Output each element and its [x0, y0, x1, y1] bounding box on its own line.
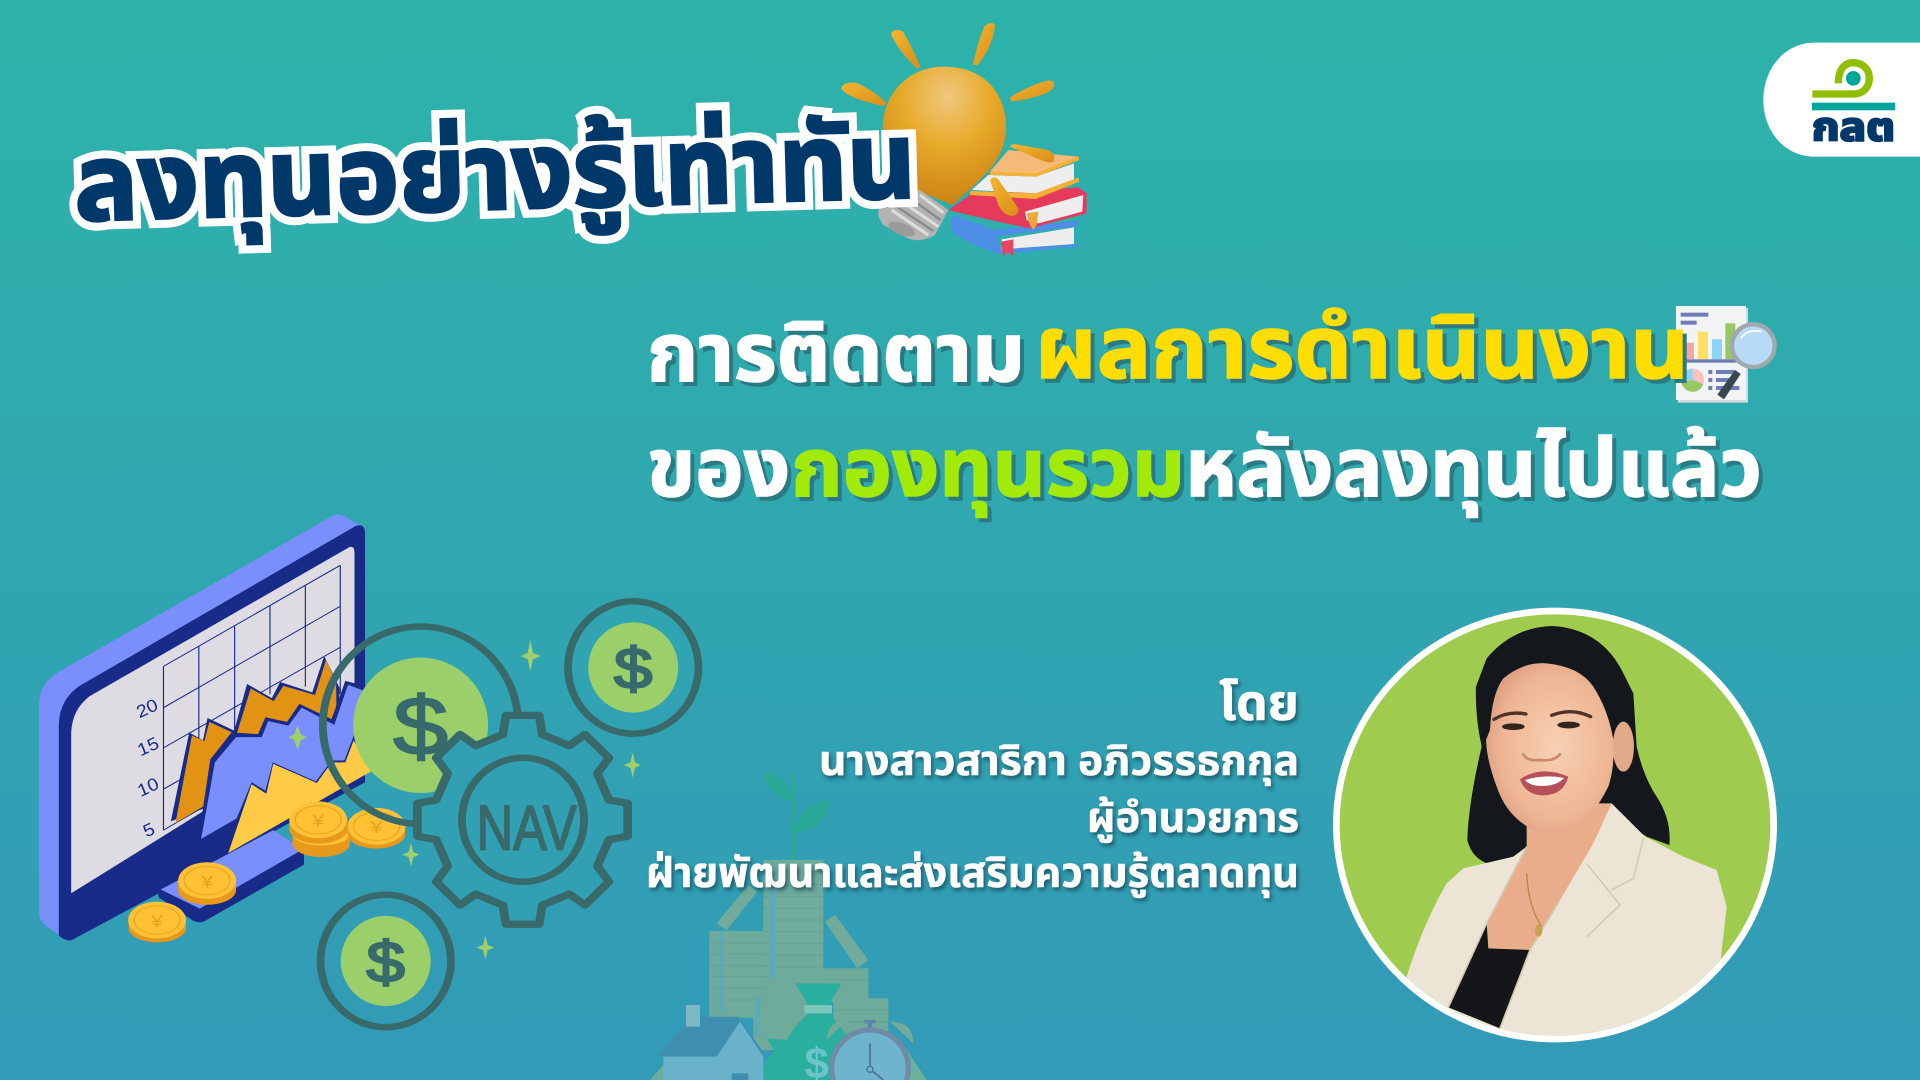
gold coins: ¥	[370, 817, 383, 837]
black top	[1448, 923, 1530, 1028]
computer monitor with line chart: 20	[130, 695, 163, 722]
lightbulb and books illustration	[840, 22, 1087, 258]
computer monitor with line chart: 15	[132, 733, 164, 759]
lightbulb screw base	[878, 190, 948, 240]
heading line 2: หลังลงทุนไปแล้ว	[1185, 409, 1762, 533]
sparkles	[402, 640, 641, 960]
computer monitor with line chart: 5	[138, 819, 159, 841]
department: ฝ่ายพัฒนาและส่งเสริมความรู้ตลาดทุน	[646, 842, 1299, 906]
name: นางสาวสาริกา อภิวรรธกกุล	[819, 730, 1299, 794]
hair	[1467, 626, 1670, 867]
icon: bottom dollar ring: $	[367, 931, 405, 994]
illustration: NAV chart, coins and gears	[39, 514, 702, 1030]
logo: กลต: กลต	[1812, 99, 1895, 159]
icon: large dollar ring	[323, 627, 518, 824]
computer monitor with line chart	[39, 514, 372, 940]
lightbulb with rays	[841, 23, 1054, 205]
icon: NAV gear	[417, 715, 628, 924]
blazer lapel shading	[1448, 838, 1643, 1028]
gold coins: ¥	[150, 912, 163, 931]
chest and neck	[1487, 803, 1612, 950]
ear	[1613, 722, 1634, 772]
eyes	[1502, 723, 1525, 730]
face	[1486, 663, 1614, 832]
heading line 1: ผลการดำเนินงาน	[1035, 287, 1689, 418]
portrait photo in circle	[1333, 608, 1777, 1042]
computer monitor with line chart: 10	[132, 774, 164, 800]
necklace	[1527, 873, 1542, 927]
title: ลงทุนอย่างรู้เท่าทัน: ลงทุนอย่างรู้เท่าทัน	[72, 84, 918, 270]
gold coins	[128, 801, 405, 942]
heading line 1: การติดตาม	[647, 294, 1025, 418]
heading line 2	[647, 409, 1762, 533]
title: ลงทุนอย่างรู้เท่าทัน: ลงทุนอย่างรู้เท่าทัน	[72, 84, 918, 270]
position: ผู้อำนวยการ	[1087, 787, 1299, 851]
nose	[1523, 753, 1561, 760]
lower rays over the books	[990, 144, 1054, 216]
icon: NAV gear: NAV	[477, 792, 577, 863]
icon: top-right dollar ring	[568, 601, 698, 734]
label: โดย: โดย	[1219, 667, 1299, 743]
presenter text block	[646, 667, 1302, 906]
heading line 1	[647, 287, 1689, 418]
heading: การติดตามผลการดำเนินงาน ของกองทุนรวมหลังลงทุนไปแล้ว	[647, 287, 1763, 533]
gold coins: ¥	[311, 811, 324, 831]
books stack	[948, 150, 1087, 257]
eyebrows	[1494, 712, 1591, 719]
background illustration: money stacks, house and clock	[650, 772, 926, 1080]
icon: bottom dollar ring	[321, 895, 451, 1027]
logo: กลต	[1763, 42, 1920, 159]
heading line 2: กองทุนรวม	[791, 409, 1185, 533]
icon: top-right dollar ring: $	[614, 637, 652, 700]
icon: large dollar ring: $	[393, 681, 448, 773]
mouth	[1520, 771, 1568, 795]
heading line 2: ของ	[647, 409, 790, 533]
blazer	[1406, 803, 1727, 1036]
icon: report and magnifier	[1676, 306, 1777, 403]
gold coins: ¥	[200, 872, 213, 892]
